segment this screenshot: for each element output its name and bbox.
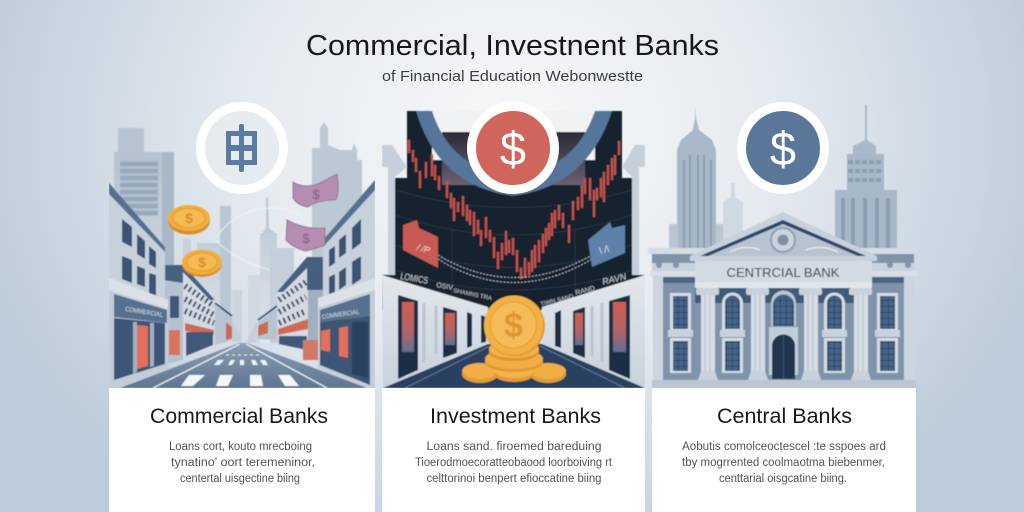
coin stack (462, 296, 566, 383)
description (682, 441, 886, 485)
street scene illustration (109, 122, 375, 388)
columns (696, 288, 872, 380)
icon: blue dollar circle (742, 106, 824, 190)
right wing pillar (622, 145, 645, 275)
left receding buildings (163, 265, 241, 365)
chart labels: RAVN (601, 271, 628, 287)
folder: blue (588, 222, 625, 267)
chart labels: OSIV (436, 282, 454, 292)
heading: Central Banks (717, 405, 852, 428)
description: tynatino' oort teremeninor, (171, 457, 315, 469)
trading floor illustration (382, 111, 645, 388)
left front building (109, 183, 168, 388)
card: commercial banks (109, 388, 375, 512)
dashed connector lines (438, 255, 592, 282)
entablature with bank name (695, 261, 872, 288)
chart labels: SHAMNS TRA (453, 288, 492, 302)
road with crosswalk (109, 343, 375, 388)
panel: investment banks (382, 106, 645, 512)
description: centertal uisgectine biing (180, 473, 300, 485)
banknotes: $ (302, 231, 310, 246)
description: Loans cort, kouto mrecboing (169, 441, 312, 453)
right wall with windows (542, 275, 645, 388)
icon: bank glyph in circle (200, 106, 284, 190)
left wall with windows (382, 275, 488, 388)
central bank illustration (648, 105, 918, 388)
pediment (690, 212, 877, 261)
description: Tioerodmoecoratteobaood loorboiving rt (415, 457, 613, 469)
left front building: COMMERCIAL (125, 306, 164, 319)
card: investment banks (382, 388, 645, 512)
folder: red (403, 220, 438, 268)
chart labels (399, 271, 628, 308)
right receding buildings (248, 257, 325, 360)
description: centtarial oisgcatine biing. (719, 473, 847, 485)
banknotes: $ (312, 187, 320, 202)
arched ceiling (416, 111, 612, 196)
folder: blue: \ /\ (598, 244, 611, 256)
facade wall (663, 277, 904, 380)
distant skyline (114, 122, 362, 343)
coin stack: $ (504, 307, 523, 345)
description: tby mogrrented coolmaotma biebenmer, (682, 457, 885, 469)
candlestick chart (409, 140, 619, 279)
left wing pillar (382, 145, 407, 275)
folder: red: / /P (415, 242, 431, 255)
chart labels: TIWN SAND (540, 294, 575, 308)
panel: commercial banks (109, 106, 375, 512)
panel: central banks (648, 105, 918, 512)
subtitle: of Financial Education Webonwestte (382, 68, 643, 85)
street (383, 344, 645, 388)
chart labels: RAND (575, 285, 596, 297)
side wings (648, 248, 918, 254)
right front building: COMMERCIAL (321, 309, 360, 321)
icon: red dollar circle (472, 106, 554, 190)
skyline towers (669, 105, 897, 248)
right front building (318, 180, 375, 388)
icon: blue dollar circle: $ (770, 122, 796, 175)
curved connector lines (216, 208, 270, 270)
description: Loans sand. firoemed bareduing (426, 441, 602, 453)
title: Commercial, Investnent Banks (306, 30, 719, 62)
icon: red dollar circle: $ (500, 122, 526, 175)
dark chart wall (382, 111, 645, 310)
card: central banks (652, 388, 916, 512)
windows (668, 290, 900, 379)
chart labels: LOMICS (399, 271, 429, 287)
banknotes (286, 174, 338, 251)
description: Aobutis comolceoctescel :te sspoes ard (682, 441, 886, 453)
gold coins (168, 205, 222, 277)
plinth (652, 380, 916, 388)
heading: Investment Banks (430, 405, 601, 428)
description: celttorinoi benpert efioccatine biing (426, 473, 602, 485)
faint grid lines (395, 190, 632, 300)
description (169, 441, 315, 485)
gold coins: $ (198, 254, 206, 270)
gold coins: $ (185, 210, 193, 226)
entablature with bank name: CENTRCIAL BANK (726, 265, 840, 280)
heading: Commercial Banks (150, 405, 328, 428)
description (415, 441, 613, 485)
